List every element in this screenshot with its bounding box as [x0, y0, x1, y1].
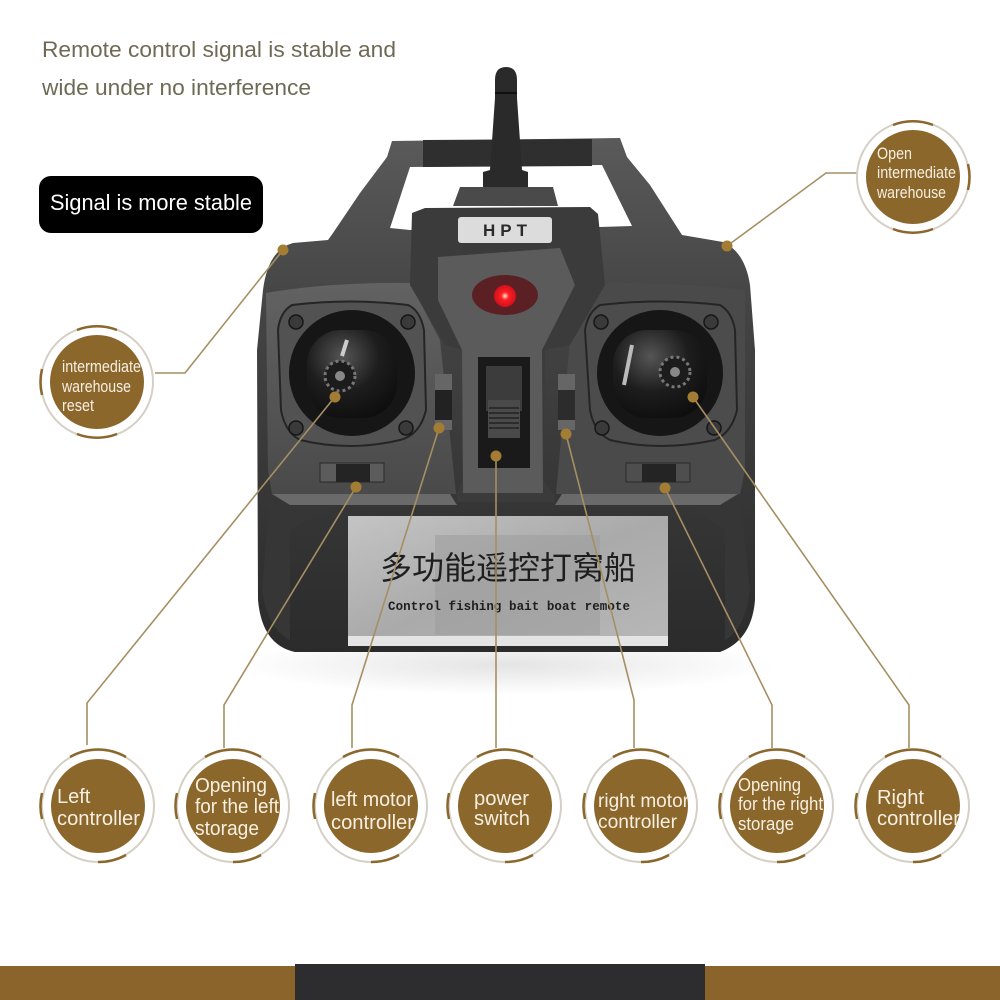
name plate: 多功能遥控打窝船 — [380, 550, 636, 586]
callout: opening for the left storage — [175, 749, 289, 862]
lower wing highlight bands — [272, 494, 738, 505]
callout: left controller: controller — [57, 808, 140, 830]
heading text: Remote control signal is stable and — [42, 37, 396, 62]
right vertical trim — [558, 374, 575, 430]
badge: signal is more stable — [39, 176, 263, 233]
callout: opening for the right storage: for the right — [738, 794, 823, 814]
callout: left motor controller: left motor — [331, 789, 413, 811]
callout: right controller: Right — [877, 787, 924, 809]
left top plate — [266, 283, 456, 494]
antenna — [483, 67, 528, 188]
right top plate — [556, 283, 745, 494]
HPT label — [458, 217, 552, 243]
right joystick — [585, 302, 737, 446]
name plate — [348, 516, 668, 646]
callout: intermediate warehouse reset — [40, 326, 153, 438]
callout: right motor controller — [583, 749, 697, 862]
antenna mount — [453, 187, 558, 206]
left horizontal trim — [320, 463, 384, 482]
callout: left motor controller — [313, 749, 427, 862]
centre console — [410, 207, 605, 502]
callout: opening for the left storage: Opening — [195, 775, 267, 797]
callout: opening for the right storage: Opening — [738, 775, 801, 795]
callout: left motor controller: controller — [331, 812, 414, 834]
HPT label: HPT — [483, 221, 528, 240]
callout: power switch: power — [474, 788, 529, 810]
callout: open intermediate warehouse: warehouse — [876, 184, 946, 202]
handle opening — [390, 165, 632, 230]
callout: right controller — [855, 749, 969, 862]
lower wing panels — [262, 495, 457, 640]
left joystick — [278, 302, 426, 446]
red LED — [472, 275, 538, 315]
callout: open intermediate warehouse: Open — [877, 145, 912, 163]
callout: open intermediate warehouse — [857, 121, 970, 233]
callout: intermediate warehouse reset: intermediate — [62, 358, 141, 376]
callout: left controller: Left — [57, 786, 91, 808]
callout: right motor controller: right motor — [598, 791, 690, 812]
callout: opening for the left storage: storage — [195, 818, 259, 840]
heading text: wide under no interference — [41, 75, 311, 100]
handle bar — [423, 139, 592, 167]
footer band — [0, 964, 1000, 1000]
callout: power switch: switch — [474, 808, 530, 830]
callout: intermediate warehouse reset: warehouse — [61, 378, 131, 396]
power switch — [478, 357, 530, 468]
remote control — [235, 67, 775, 695]
callout: opening for the left storage: for the left — [195, 796, 279, 818]
leader lines and dots — [87, 173, 909, 748]
callout: power switch — [447, 749, 561, 862]
badge: signal is more stable: Signal is more stable — [50, 190, 252, 215]
callout: left controller — [40, 749, 154, 862]
heading text — [41, 37, 396, 100]
ground shadow — [235, 635, 775, 695]
callout: opening for the right storage — [719, 749, 833, 862]
callout: open intermediate warehouse: intermediate — [877, 164, 956, 182]
callout: right motor controller: controller — [598, 812, 678, 833]
callout: right controller: controller — [877, 808, 960, 830]
name plate: Control fishing bait boat remote — [388, 600, 630, 614]
callout: opening for the right storage: storage — [738, 814, 794, 834]
left vertical trim — [435, 374, 452, 430]
right horizontal trim — [626, 463, 690, 482]
remote body — [257, 138, 755, 652]
callout: intermediate warehouse reset: reset — [62, 397, 94, 415]
